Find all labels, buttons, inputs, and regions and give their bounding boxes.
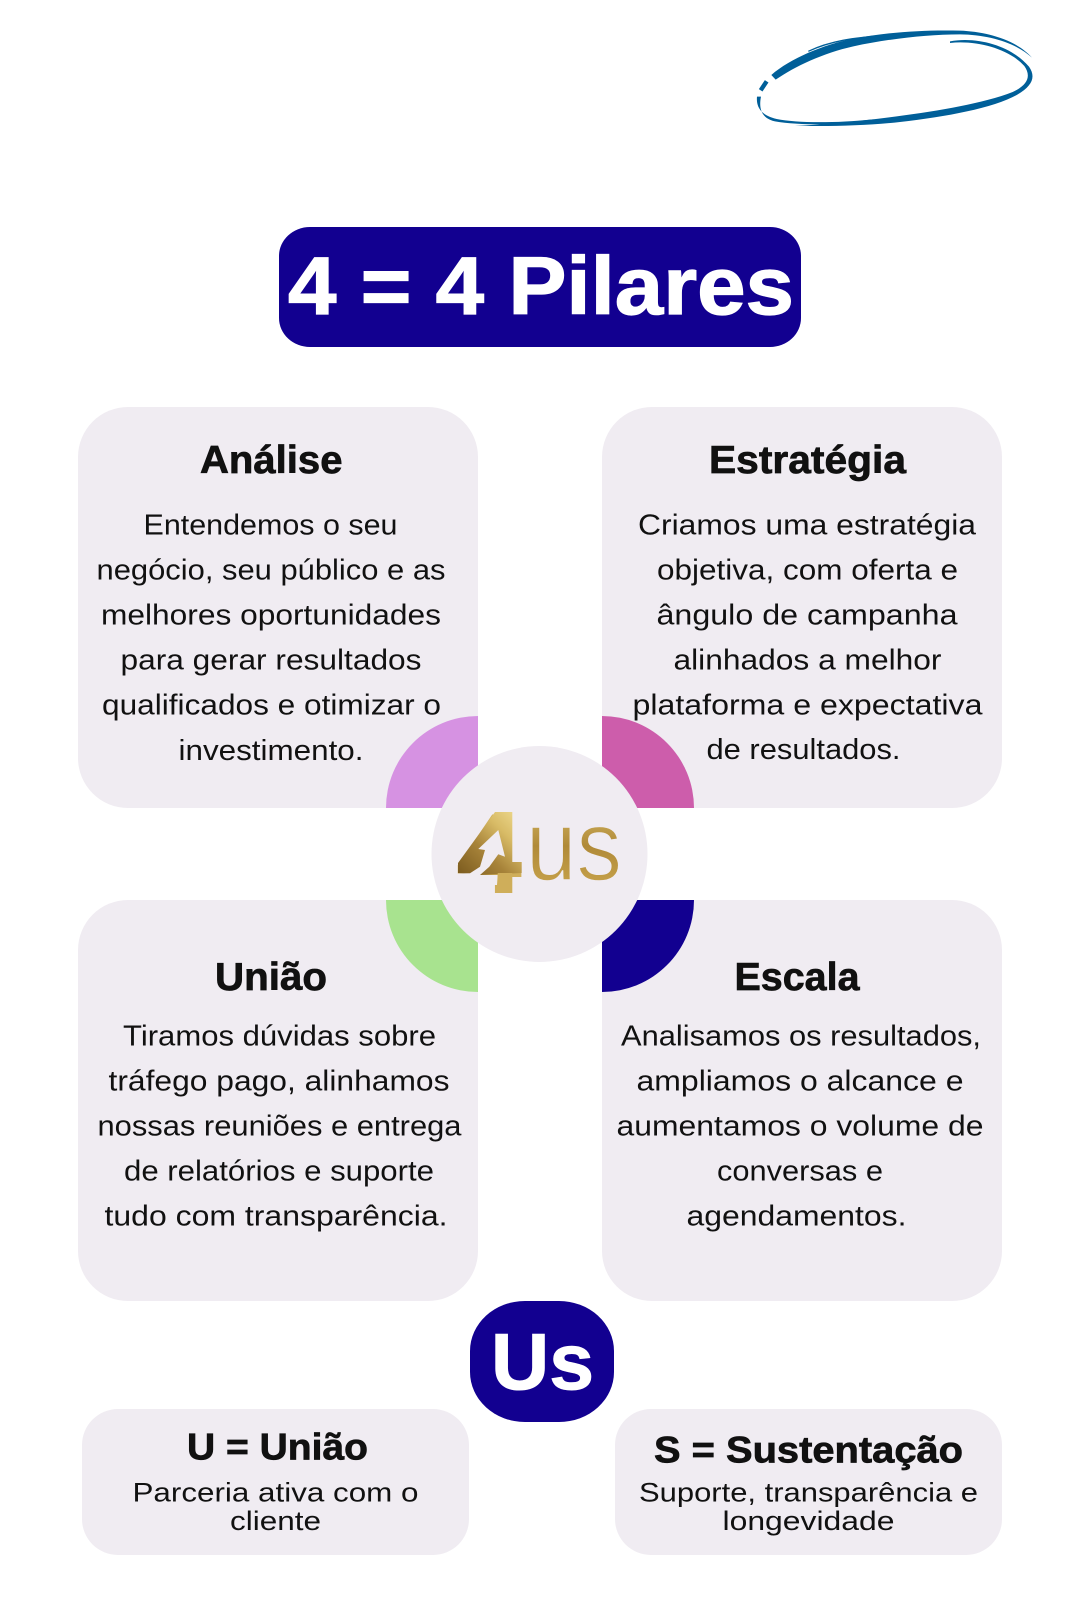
panel: União: tudo com transparência. (104, 1200, 447, 1232)
panel: Análise (78, 407, 478, 808)
hand-drawn ellipse scribble (757, 30, 1032, 126)
logo letters us: us (526, 790, 622, 902)
panel: U = União (82, 1409, 469, 1555)
logo arrow (454, 812, 522, 893)
quarter circle: lilac (386, 716, 478, 808)
quarter circle: navy (602, 900, 694, 992)
panel: União: União (215, 956, 327, 999)
Us badge: Us (491, 1317, 594, 1406)
quarter circle: pink (602, 716, 694, 808)
panel: Estratégia: objetiva, com oferta e (657, 554, 958, 586)
panel: União: tráfego pago, alinhamos (108, 1065, 450, 1097)
panel: Escala: agendamentos. (686, 1200, 906, 1232)
panel: Escala: aumentamos o volume de (616, 1110, 984, 1142)
quarter circle: green (386, 900, 478, 992)
panel: U = União: Parceria ativa com o (132, 1478, 418, 1508)
panel: Estratégia: plataforma e expectativa (632, 689, 983, 721)
panel: Escala: Analisamos os resultados, (621, 1020, 981, 1052)
panel: S = Sustentação: S = Sustentação (654, 1430, 963, 1471)
panel: Estratégia: alinhados a melhor (674, 644, 942, 676)
panel: União: nossas reuniões e entrega (98, 1110, 462, 1142)
panel: Escala: Escala (734, 956, 860, 999)
title badge (279, 227, 801, 347)
panel: Análise: Análise (200, 439, 342, 482)
panel: Análise: investimento. (178, 735, 364, 767)
panel: Análise: negócio, seu público e as (96, 554, 446, 586)
center logo 4us (432, 746, 648, 962)
panel: Estratégia: de resultados. (706, 734, 900, 766)
panel: Análise: para gerar resultados (120, 644, 422, 676)
panel: S = Sustentação (615, 1409, 1002, 1555)
panel: U = União: cliente (230, 1506, 321, 1536)
panel: Estratégia: ângulo de campanha (656, 599, 958, 631)
panel: União: de relatórios e suporte (124, 1155, 434, 1187)
panel: Escala: ampliamos o alcance e (636, 1065, 964, 1097)
panel: S = Sustentação: longevidade (722, 1506, 894, 1536)
panel: Escala: conversas e (717, 1155, 883, 1187)
panel: União: Tiramos dúvidas sobre (123, 1020, 436, 1052)
title badge: 4 = 4 Pilares (288, 241, 794, 332)
logo numeral 4: 4 (456, 791, 522, 918)
panel: Análise: melhores oportunidades (101, 599, 441, 631)
panel: Estratégia: Criamos uma estratégia (638, 509, 977, 541)
panel: S = Sustentação: Suporte, transparência e (639, 1478, 978, 1508)
panel: Análise: qualificados e otimizar o (102, 689, 441, 721)
panel: U = União: U = União (187, 1426, 368, 1467)
panel: Análise: Entendemos o seu (144, 509, 398, 541)
panel: Estratégia: Estratégia (709, 439, 906, 482)
panel: Estratégia (602, 407, 1002, 808)
panel: Escala (602, 900, 1002, 1301)
Us badge (470, 1301, 614, 1422)
panel: União (78, 900, 478, 1301)
